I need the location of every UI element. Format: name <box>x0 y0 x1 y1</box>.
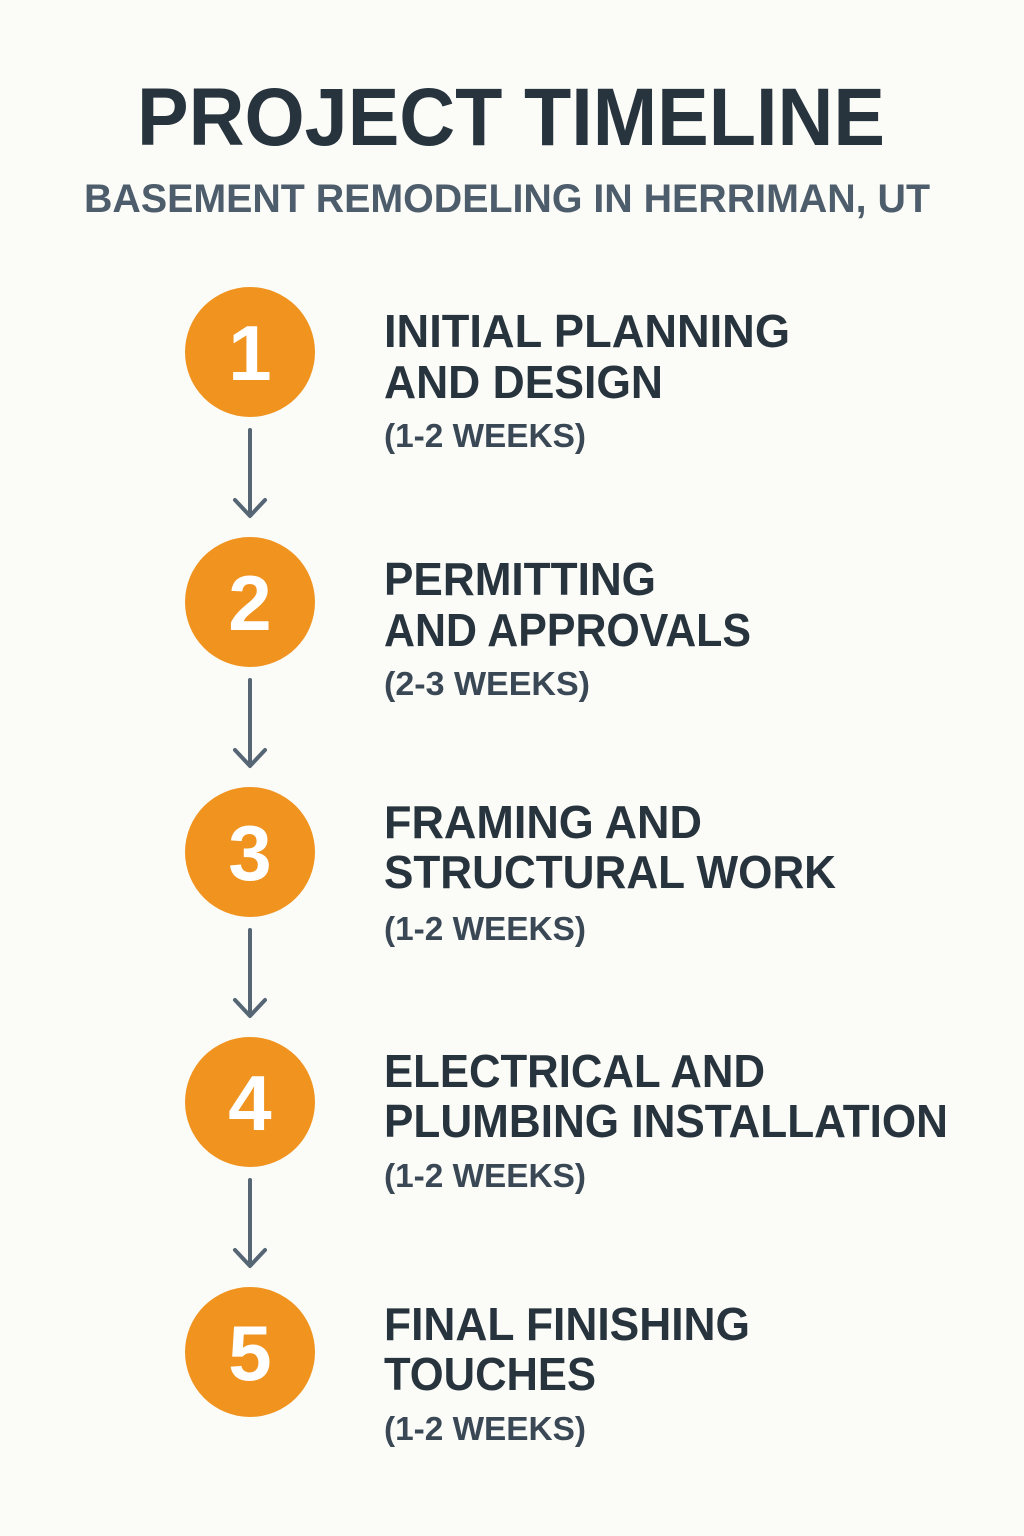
step 4 text <box>384 1045 948 1194</box>
step 4 text: ELECTRICAL AND <box>384 1045 765 1097</box>
icon: circle 2 <box>185 537 315 667</box>
step 2 text <box>384 553 751 702</box>
step 3 text: STRUCTURAL WORK <box>384 846 836 898</box>
arrow 3 <box>235 930 265 1016</box>
icon: circle 1: 1 <box>228 309 272 397</box>
step 1 text <box>384 305 790 454</box>
step 2 text: PERMITTING <box>384 553 656 605</box>
icon: circle 5: 5 <box>228 1309 272 1397</box>
icon: circle 5 <box>185 1287 315 1417</box>
step 4 text: PLUMBING INSTALLATION <box>384 1095 948 1147</box>
step 4 text: (1-2 WEEKS) <box>384 1157 586 1194</box>
step 3 text: FRAMING AND <box>384 796 702 848</box>
step 5 text <box>384 1298 750 1447</box>
step 5 text: TOUCHES <box>384 1348 596 1400</box>
icon: circle 3 <box>185 787 315 917</box>
step 2 text: AND APPROVALS <box>384 604 751 656</box>
step 1 text: INITIAL PLANNING <box>384 305 790 357</box>
step 2 <box>185 537 751 702</box>
icon: circle 4: 4 <box>228 1059 272 1147</box>
step 5 text: (1-2 WEEKS) <box>384 1410 586 1447</box>
step 1 text: (1-2 WEEKS) <box>384 417 586 454</box>
step 5 text: FINAL FINISHING <box>384 1298 750 1350</box>
step 4 <box>185 1037 948 1194</box>
arrow 1 <box>235 430 265 516</box>
step 5 <box>185 1287 750 1447</box>
step 2 text: (2-3 WEEKS) <box>384 665 590 702</box>
step 3 text: (1-2 WEEKS) <box>384 910 586 947</box>
step 3 text <box>384 796 836 947</box>
step 1 text: AND DESIGN <box>384 356 663 408</box>
step 1 <box>185 287 790 454</box>
icon: circle 4 <box>185 1037 315 1167</box>
subtitle: BASEMENT REMODELING IN HERRIMAN, UT <box>84 177 930 221</box>
title: PROJECT TIMELINE <box>137 72 885 163</box>
arrow 4 <box>235 1180 265 1266</box>
icon: circle 3: 3 <box>228 809 272 897</box>
icon: circle 1 <box>185 287 315 417</box>
icon: circle 2: 2 <box>228 559 272 647</box>
arrow 2 <box>235 680 265 766</box>
step 3 <box>185 787 836 947</box>
